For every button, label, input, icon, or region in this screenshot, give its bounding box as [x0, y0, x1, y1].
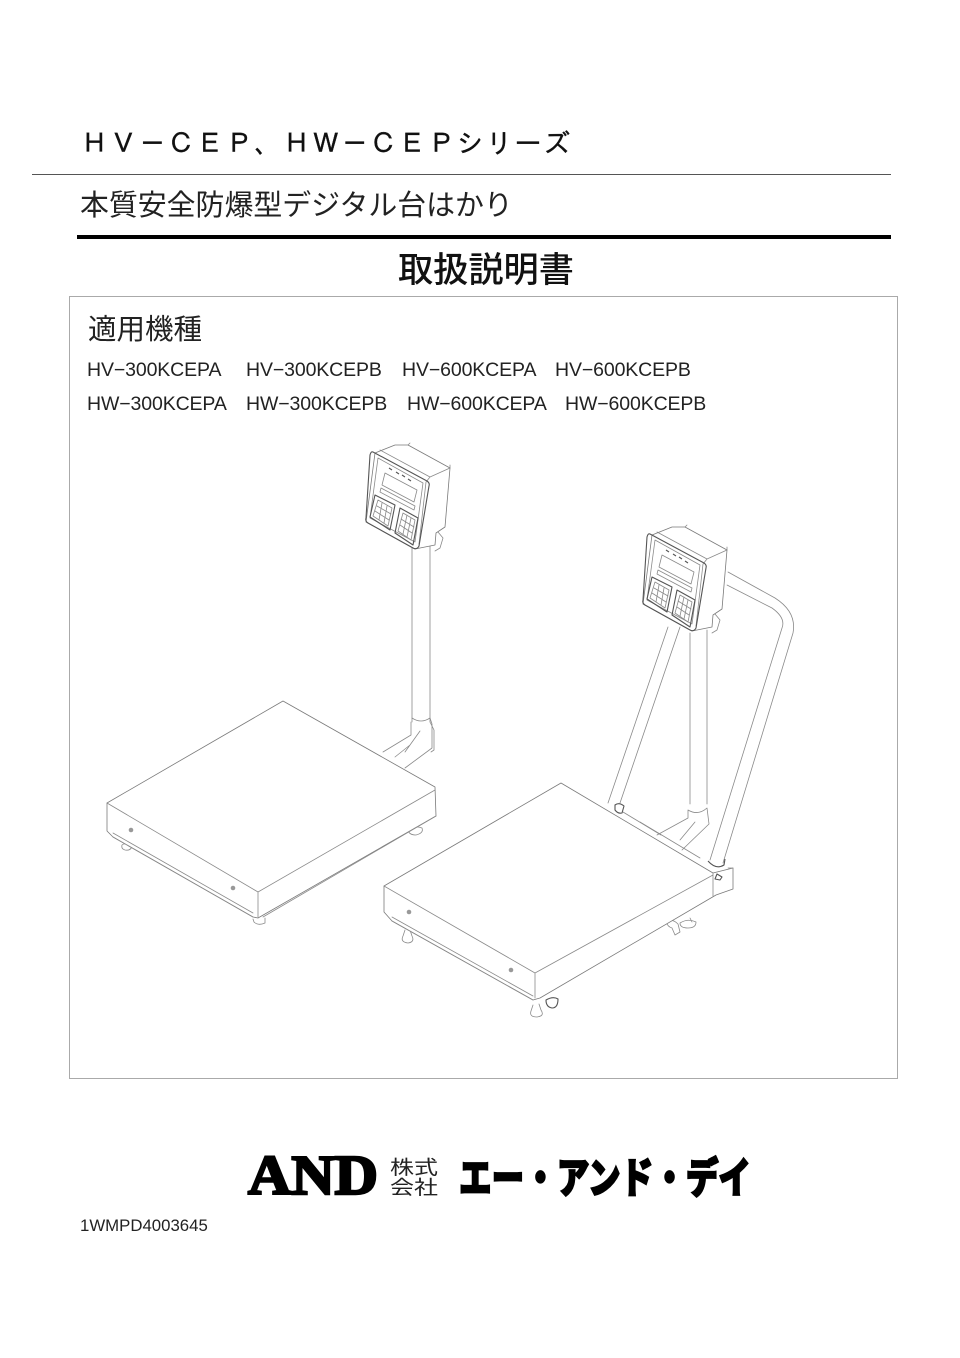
base bracket — [623, 808, 709, 858]
model list — [87, 359, 706, 415]
platform — [384, 783, 733, 1000]
icon: indicator head — [366, 443, 450, 551]
icon: indicator head — [643, 525, 727, 633]
illustration: left scale HV — [107, 443, 450, 924]
side hole 1 — [407, 910, 411, 914]
side hole 2 — [509, 968, 513, 972]
foot front — [253, 918, 265, 924]
handle — [710, 572, 794, 863]
logo mark: AND — [248, 1145, 378, 1207]
model HV-600KCEPA: HV−600KCEPA — [402, 359, 536, 381]
foot rear — [408, 827, 422, 835]
company type — [390, 1153, 438, 1200]
logo: A&D — [248, 1145, 751, 1207]
model HW-600KCEPB: HW−600KCEPB — [565, 393, 706, 415]
side hole 1 — [129, 828, 133, 832]
caster and foot rear — [666, 918, 696, 935]
bolt left — [615, 804, 624, 813]
manual heading: 取扱説明書 — [398, 242, 574, 293]
side hole 2 — [231, 886, 235, 890]
document number: 1WMPD4003645 — [80, 1216, 208, 1235]
model HW-300KCEPA: HW−300KCEPA — [87, 393, 227, 415]
platform — [107, 701, 436, 918]
model HV-300KCEPB: HV−300KCEPB — [246, 359, 382, 381]
panel: applicable models and illustration — [69, 296, 898, 1079]
caster front — [546, 998, 558, 1008]
company type: 株式 — [390, 1153, 438, 1180]
series title: ＨＶ－ＣＥＰ、ＨＷ－ＣＥＰシリーズ — [81, 130, 572, 157]
company type: 会社 — [390, 1173, 438, 1200]
foot left — [122, 844, 132, 850]
pole — [412, 540, 430, 722]
foot front — [531, 1004, 542, 1017]
model HV-300KCEPA: HV−300KCEPA — [87, 359, 221, 381]
applicable models heading: 適用機種 — [88, 307, 202, 348]
handle mount — [708, 859, 725, 880]
foot left — [402, 930, 413, 943]
base bracket — [383, 718, 434, 768]
model HW-600KCEPA: HW−600KCEPA — [407, 393, 547, 415]
pole — [690, 630, 707, 804]
model HV-600KCEPB: HV−600KCEPB — [555, 359, 691, 381]
model HW-300KCEPB: HW−300KCEPB — [246, 393, 387, 415]
rear arm — [608, 627, 680, 803]
company name: エー・アンド・デイ — [459, 1145, 751, 1206]
product name: 本質安全防爆型デジタル台はかり — [80, 182, 513, 224]
illustration: right scale HW — [384, 525, 794, 1017]
